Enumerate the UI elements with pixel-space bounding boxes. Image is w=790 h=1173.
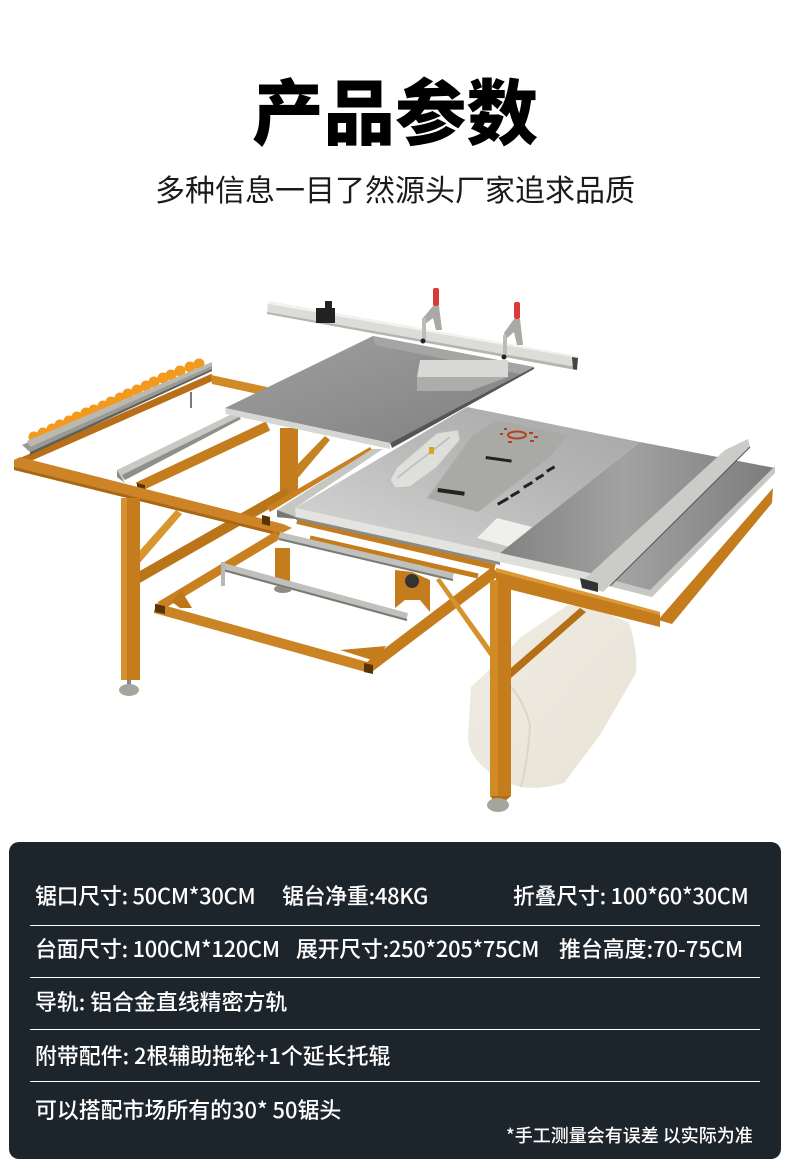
subtitle: 多种信息一目了然源头厂家追求品质 (155, 166, 635, 210)
QR label (477, 518, 532, 547)
row 1 specs (35, 880, 749, 911)
product image: folding sliding table saw (14, 288, 775, 812)
sliding table top (225, 336, 534, 449)
left extension frame (14, 375, 372, 680)
front leveling foot (487, 798, 509, 812)
right table frame, legs and braces (436, 488, 773, 802)
main table top (277, 407, 775, 597)
folded size: 折叠尺寸: 100*60*30CM (513, 880, 749, 911)
footnote: *手工测量会有误差 以实际为准 (506, 1122, 753, 1148)
rear legs and braces (126, 428, 430, 612)
roller rail with orange rollers (22, 358, 212, 455)
insert plate (427, 420, 568, 512)
blade guard (390, 430, 460, 488)
unfolded size: 展开尺寸:250*205*75CM (296, 933, 539, 964)
left leveling foot (119, 680, 139, 696)
row 3: guide rail: 导轨: 铝合金直线精密方轨 (35, 986, 287, 1017)
support rollers (221, 536, 453, 620)
side table top (500, 442, 775, 595)
row 5: blade compatibility: 可以搭配市场所有的30* 50锯头 (35, 1094, 341, 1125)
fence with clamps (267, 288, 578, 391)
slots (437, 456, 555, 506)
middle sliding rail (117, 414, 241, 483)
under-table bars (297, 521, 495, 576)
table size: 台面尺寸: 100CM*120CM (35, 933, 280, 964)
row 2 specs (35, 933, 743, 964)
sliding table height: 推台高度:70-75CM (559, 933, 743, 964)
flip stop clamp 2 (502, 302, 523, 360)
row 4: accessories: 附带配件: 2根辅助拖轮+1个延长托辊 (35, 1040, 390, 1071)
title: 产品参数 (252, 56, 538, 160)
rear leveling foot (274, 585, 292, 593)
rip fence (580, 439, 750, 592)
drawer frame under table (155, 535, 496, 674)
flip stop clamp 1 (420, 288, 442, 344)
dust collection bag (468, 605, 636, 788)
saw opening size: 锯口尺寸: 50CM*30CM (35, 880, 255, 911)
router plate red holes (500, 428, 538, 443)
net weight: 锯台净重:48KG (282, 880, 428, 911)
fence lock block (316, 301, 335, 323)
parameters panel (9, 842, 781, 1159)
